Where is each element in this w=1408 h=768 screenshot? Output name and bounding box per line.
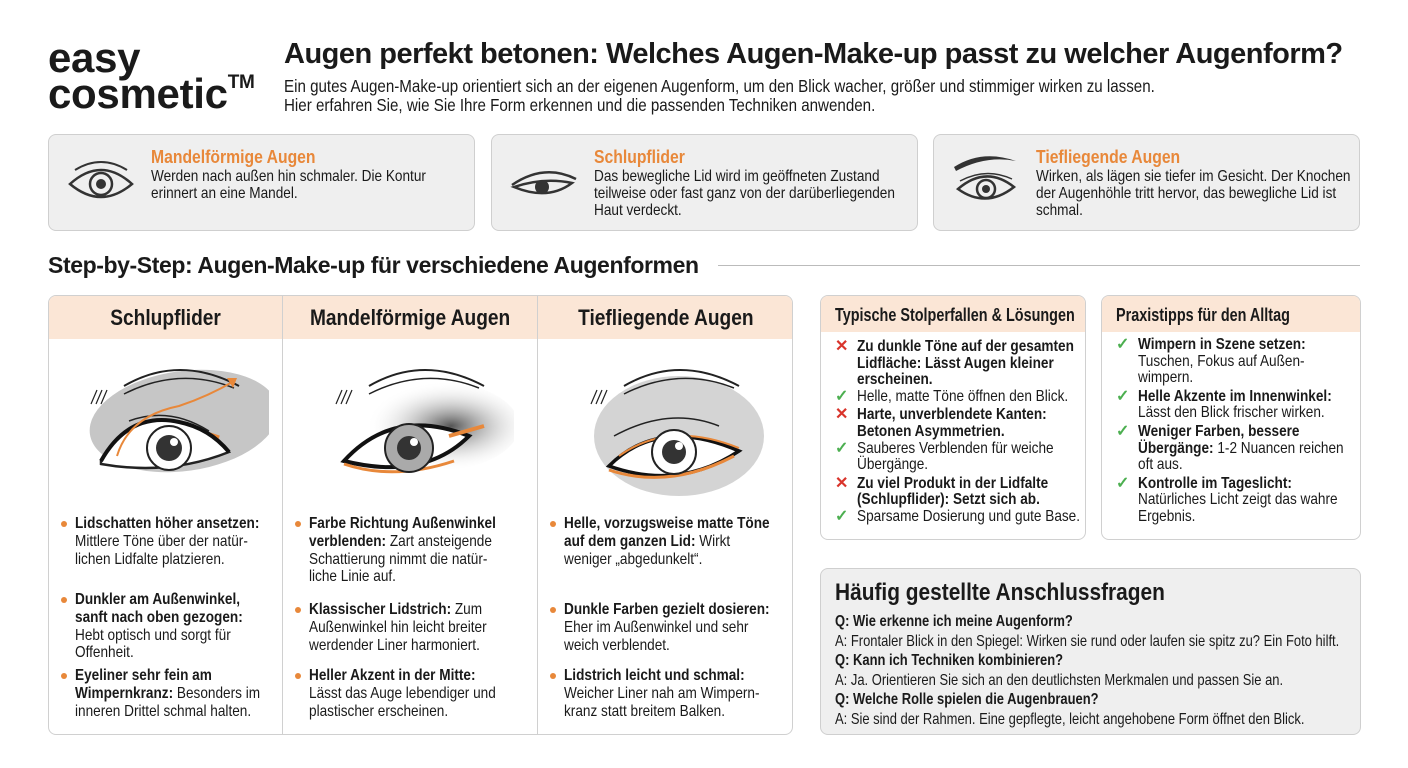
panel: Stolperfallen: (Schlupflider): Setzt sich ab. bbox=[857, 491, 1040, 508]
icon: almond eye bbox=[68, 161, 134, 198]
bullets: Schlupflider: Dunkler am Außenwinkel, bbox=[75, 591, 240, 608]
bullets: Tiefliegende: Dunkle Farben gezielt dosieren: bbox=[564, 601, 770, 618]
bullets: Schlupflider: inneren Drittel schmal halten. bbox=[75, 703, 251, 720]
bullets: Schlupflider bbox=[61, 515, 260, 720]
panel: FAQ bbox=[820, 568, 1361, 735]
FAQ items: A: Sie sind der Rahmen. Eine gepflegte, leicht angehobene Form öffnet den Blick. bbox=[835, 710, 1304, 728]
panel: Praxistipps: Kontrolle im Tageslicht: bbox=[1138, 475, 1292, 492]
panel: Stolperfallen: erscheinen. bbox=[857, 371, 933, 388]
panel: Stolperfallen: Harte, unverblendete Kanten: bbox=[857, 406, 1047, 423]
column heading: Schlupflider: Schlupflider bbox=[110, 305, 221, 330]
card: Schlupflider: Haut verdeckt. bbox=[594, 202, 682, 219]
panel: Stolperfallen: Sparsame Dosierung und gute Base. bbox=[857, 508, 1080, 525]
card: Mandelförmige Augen bbox=[48, 134, 475, 231]
column heading: Tiefliegende: Tiefliegende Augen bbox=[578, 305, 754, 330]
panel: Stolperfallen: ✓ bbox=[835, 440, 848, 457]
panel: Stolperfallen: Sauberes Verblenden für weiche bbox=[857, 440, 1054, 457]
panel: Praxistipps: Lässt den Blick frischer wirken. bbox=[1138, 404, 1325, 421]
panel: Praxistipps: ✓ bbox=[1116, 388, 1129, 405]
bullets: Schlupflider: Wimpernkranz: Besonders im bbox=[75, 685, 260, 702]
card: Tiefliegende Augen: Tiefliegende Augen bbox=[1036, 146, 1180, 167]
column heading: Mandelförmige: Mandelförmige Augen bbox=[310, 305, 510, 330]
card: Mandelförmige Augen: erinnert an eine Mandel. bbox=[151, 185, 298, 202]
bullets: Tiefliegende: auf dem ganzen Lid: Wirkt bbox=[564, 533, 730, 550]
panel: Praxistipps: oft aus. bbox=[1138, 456, 1183, 473]
panel: Stolperfallen: Helle, matte Töne öffnen den Blick. bbox=[857, 388, 1068, 405]
bullets: Tiefliegende: Weicher Liner nah am Wimpern- bbox=[564, 685, 760, 702]
panel: Praxistipps: ✓ bbox=[1116, 423, 1129, 440]
bullets: Mandelförmige: Farbe Richtung Außenwinkel bbox=[309, 515, 496, 532]
panel: Praxistipps: Weniger Farben, bessere bbox=[1138, 423, 1300, 440]
panel: Stolperfallen: ✕ bbox=[835, 406, 848, 423]
logo bbox=[48, 34, 255, 117]
panel: Stolperfallen: ✕ bbox=[835, 475, 848, 492]
panel: Stolperfallen: Typische Stolperfallen & Lösungen bbox=[835, 305, 1075, 325]
card: Tiefliegende Augen: schmal. bbox=[1036, 202, 1083, 219]
bullets: Mandelförmige: plastischer erscheinen. bbox=[309, 703, 448, 720]
panel: Praxistipps: Natürliches Licht zeigt das wahre bbox=[1138, 491, 1338, 508]
panel: Praxistipps: Praxistipps für den Alltag bbox=[1116, 305, 1290, 325]
panel: Praxistipps: Übergänge: 1-2 Nuancen reichen bbox=[1138, 440, 1344, 457]
FAQ items: A: Ja. Orientieren Sie sich an den deutlichsten Merkmalen und passen Sie an. bbox=[835, 672, 1283, 688]
card: Tiefliegende Augen: der Augenhöhle tritt hervor, das bewegliche Lid ist bbox=[1036, 185, 1336, 202]
panel: Stolperfallen: Übergänge. bbox=[857, 456, 928, 473]
FAQ items: Q: Wie erkenne ich meine Augenform? bbox=[835, 613, 1073, 630]
panel: Stolperfallen: ✓ bbox=[835, 508, 848, 525]
bullets: Tiefliegende: kranz statt breitem Balken. bbox=[564, 703, 725, 720]
panel: Praxistipps: Ergebnis. bbox=[1138, 508, 1195, 525]
FAQ items bbox=[835, 613, 1339, 728]
panel: Praxistipps: ✓ bbox=[1116, 475, 1129, 492]
panel: Praxistipps bbox=[1101, 295, 1361, 540]
panel: Stolperfallen: Zu dunkle Töne auf der gesamten bbox=[857, 338, 1074, 355]
FAQ items: A: Frontaler Blick in den Spiegel: Wirken sie rund oder laufen sie spitz zu? Ein Foto hilft. bbox=[835, 632, 1339, 650]
panel: Praxistipps: ✓ bbox=[1116, 336, 1129, 353]
subtitle bbox=[284, 76, 1155, 115]
bullets: Tiefliegende: Lidstrich leicht und schmal: bbox=[564, 667, 745, 684]
icon: deep-set eye bbox=[954, 156, 1016, 200]
bullets: Tiefliegende: weniger „abgedunkelt“. bbox=[564, 551, 702, 568]
card: Schlupflider: Das bewegliche Lid wird im geöffneten Zustand bbox=[594, 168, 880, 185]
FAQ heading: Häufig gestellte Anschlussfragen bbox=[835, 579, 1165, 606]
card: Schlupflider: Schlupflider bbox=[594, 146, 685, 167]
illustration: hooded eye bbox=[90, 369, 269, 472]
card: Schlupflider: teilweise oder fast ganz von der darüberliegenden bbox=[594, 185, 895, 202]
card: Mandelförmige Augen: Werden nach außen hin schmaler. Die Kontur bbox=[151, 168, 426, 185]
bullets: Mandelförmige: Klassischer Lidstrich: Zum bbox=[309, 601, 482, 618]
FAQ items: Q: Kann ich Techniken kombinieren? bbox=[835, 652, 1063, 669]
panel: Stolperfallen: ✓ bbox=[835, 388, 848, 405]
bullets: Schlupflider: lichen Lidfalte platzieren. bbox=[75, 551, 225, 568]
subtitle: Hier erfahren Sie, wie Sie Ihre Form erkennen und die passenden Techniken anwenden. bbox=[284, 95, 875, 115]
section heading: Step-by-Step: Augen-Make-up für verschiedene Augenformen bbox=[48, 252, 699, 278]
bullets: Mandelförmige: Außenwinkel hin leicht breiter bbox=[309, 619, 487, 636]
panel: Stolperfallen bbox=[820, 295, 1086, 540]
bullets: Schlupflider: Lidschatten höher ansetzen: bbox=[75, 515, 259, 532]
card: Schlupflider bbox=[491, 134, 918, 231]
bullets: Mandelförmige bbox=[295, 515, 496, 720]
bullets: Tiefliegende: Helle, vorzugsweise matte Töne bbox=[564, 515, 770, 532]
panel: Praxistipps: Wimpern in Szene setzen: bbox=[1138, 336, 1306, 353]
card: Mandelförmige Augen: Mandelförmige Augen bbox=[151, 146, 316, 167]
bullets: Schlupflider: sanft nach oben gezogen: bbox=[75, 609, 243, 626]
panel: Stolperfallen: Lidfläche: Lässt Augen kleiner bbox=[857, 355, 1054, 372]
FAQ items: Q: Welche Rolle spielen die Augenbrauen? bbox=[835, 691, 1099, 708]
bullets: Tiefliegende: Eher im Außenwinkel und sehr bbox=[564, 619, 748, 636]
bullets: Mandelförmige: verblenden: Zart ansteigende bbox=[309, 533, 492, 550]
bullets: Mandelförmige: Heller Akzent in der Mitte: bbox=[309, 667, 476, 684]
bullets: Mandelförmige: Lässt das Auge lebendiger und bbox=[309, 685, 496, 702]
subtitle: Ein gutes Augen-Make-up orientiert sich an der eigenen Augenform, um den Blick wacher, größer und stimmiger wirken zu lassen. bbox=[284, 76, 1155, 96]
bullets: Mandelförmige: werdender Liner harmoniert. bbox=[309, 637, 480, 654]
panel: step-by-step table bbox=[48, 295, 793, 735]
bullets: Mandelförmige: liche Linie auf. bbox=[309, 568, 396, 585]
bullets: Mandelförmige: Schattierung nimmt die natür- bbox=[309, 551, 487, 568]
panel: Praxistipps: wimpern. bbox=[1138, 369, 1193, 386]
bullets: Schlupflider: Offenheit. bbox=[75, 644, 134, 661]
card: Tiefliegende Augen bbox=[933, 134, 1360, 231]
bullets: Schlupflider: Hebt optisch und sorgt für bbox=[75, 627, 231, 644]
bullets: Schlupflider: Eyeliner sehr fein am bbox=[75, 667, 212, 684]
logo: easy bbox=[48, 34, 140, 81]
bullets: Schlupflider: Mittlere Töne über der natür- bbox=[75, 533, 248, 550]
bullets: Tiefliegende bbox=[550, 515, 770, 720]
panel: Praxistipps: Tuschen, Fokus auf Außen- bbox=[1138, 353, 1305, 370]
panel: Stolperfallen: ✕ bbox=[835, 338, 848, 355]
panel: Praxistipps: Helle Akzente im Innenwinkel: bbox=[1138, 388, 1332, 405]
bullets: Tiefliegende: weich verblendet. bbox=[564, 637, 670, 654]
panel: Stolperfallen: Zu viel Produkt in der Lidfalte bbox=[857, 475, 1048, 492]
title: Augen perfekt betonen: Welches Augen-Make-up passt zu welcher Augenform? bbox=[284, 38, 1343, 70]
panel: Stolperfallen: Betonen Asymmetrien. bbox=[857, 423, 1005, 440]
card: Tiefliegende Augen: Wirken, als lägen sie tiefer im Gesicht. Der Knochen bbox=[1036, 168, 1350, 185]
logo: cosmeticTM bbox=[48, 70, 255, 117]
icon: hooded eye bbox=[510, 171, 576, 194]
illustration: deep-set eye bbox=[590, 369, 764, 496]
illustration: almond eye bbox=[336, 369, 514, 474]
